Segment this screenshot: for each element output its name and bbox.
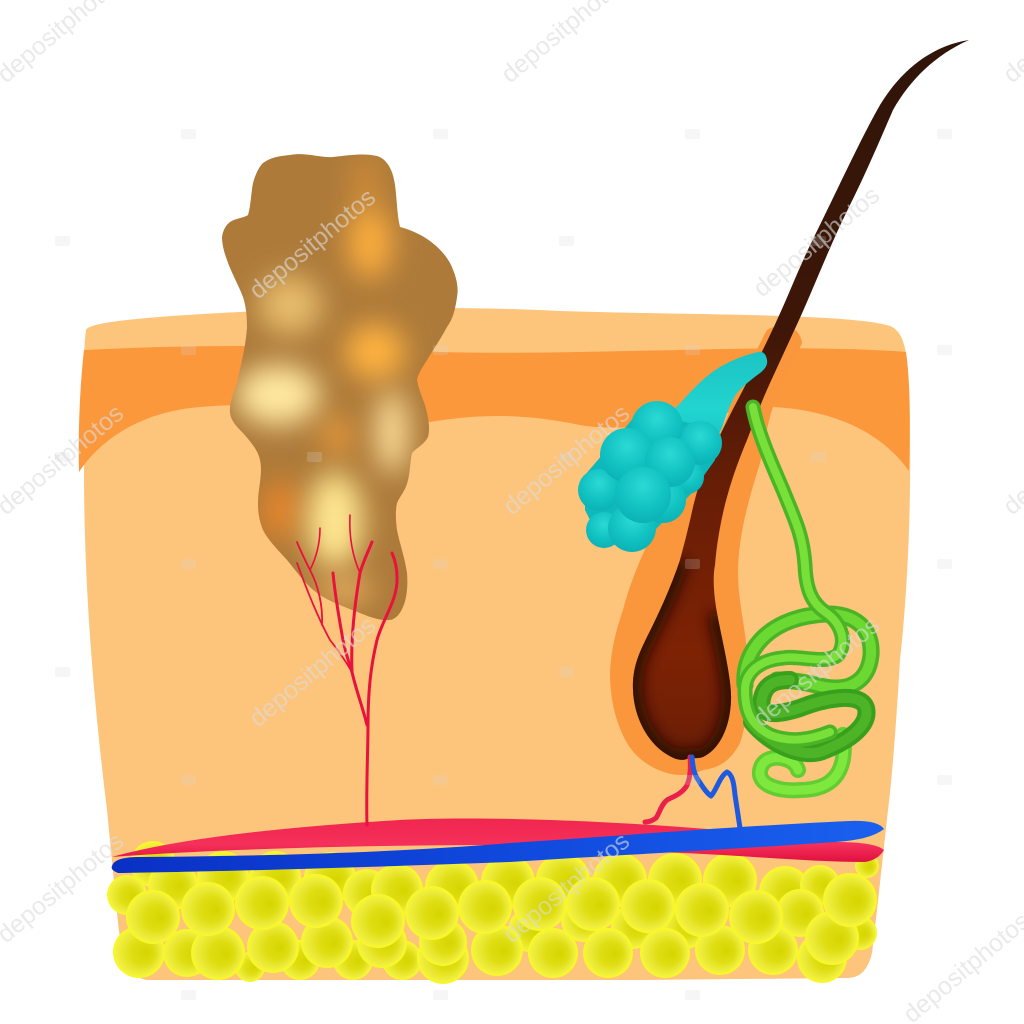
wart	[222, 154, 458, 620]
fat layer	[107, 841, 879, 984]
capillaries under follicle	[645, 757, 740, 828]
watermarks: depositphotos	[244, 611, 381, 733]
follicle sheath	[610, 326, 802, 775]
watermarks: depositphotos	[498, 399, 635, 521]
duct and front loop	[745, 407, 842, 740]
watermarks: depositphotos	[498, 827, 635, 949]
bulb edge shading	[633, 560, 731, 760]
wart blood vessels	[297, 515, 397, 825]
blue blood vessel	[112, 821, 884, 873]
sweat gland	[745, 407, 871, 790]
wart highlights	[236, 155, 408, 604]
bottom spiral	[760, 735, 844, 790]
dermis layer	[83, 308, 910, 980]
lower row fat cells	[113, 911, 859, 984]
back loop	[745, 614, 871, 688]
orange subsurface layer	[79, 346, 910, 472]
lobes	[670, 460, 704, 494]
watermarks: depositphotos	[748, 611, 885, 733]
red capillary	[645, 757, 690, 822]
dark loop	[752, 680, 867, 753]
duct	[660, 352, 767, 470]
blue capillary	[692, 757, 740, 828]
gland body	[585, 410, 715, 550]
front row fat cells	[126, 873, 877, 948]
watermarks: depositphotos	[244, 183, 381, 305]
watermark camera marks	[55, 129, 952, 1000]
watermarks: depositphotos	[748, 181, 885, 303]
panel: skin block	[79, 308, 910, 980]
back row fat cells	[107, 841, 879, 952]
hair shaft and follicle	[633, 40, 969, 760]
red blood vessel	[112, 818, 884, 862]
sebaceous gland	[578, 352, 767, 552]
